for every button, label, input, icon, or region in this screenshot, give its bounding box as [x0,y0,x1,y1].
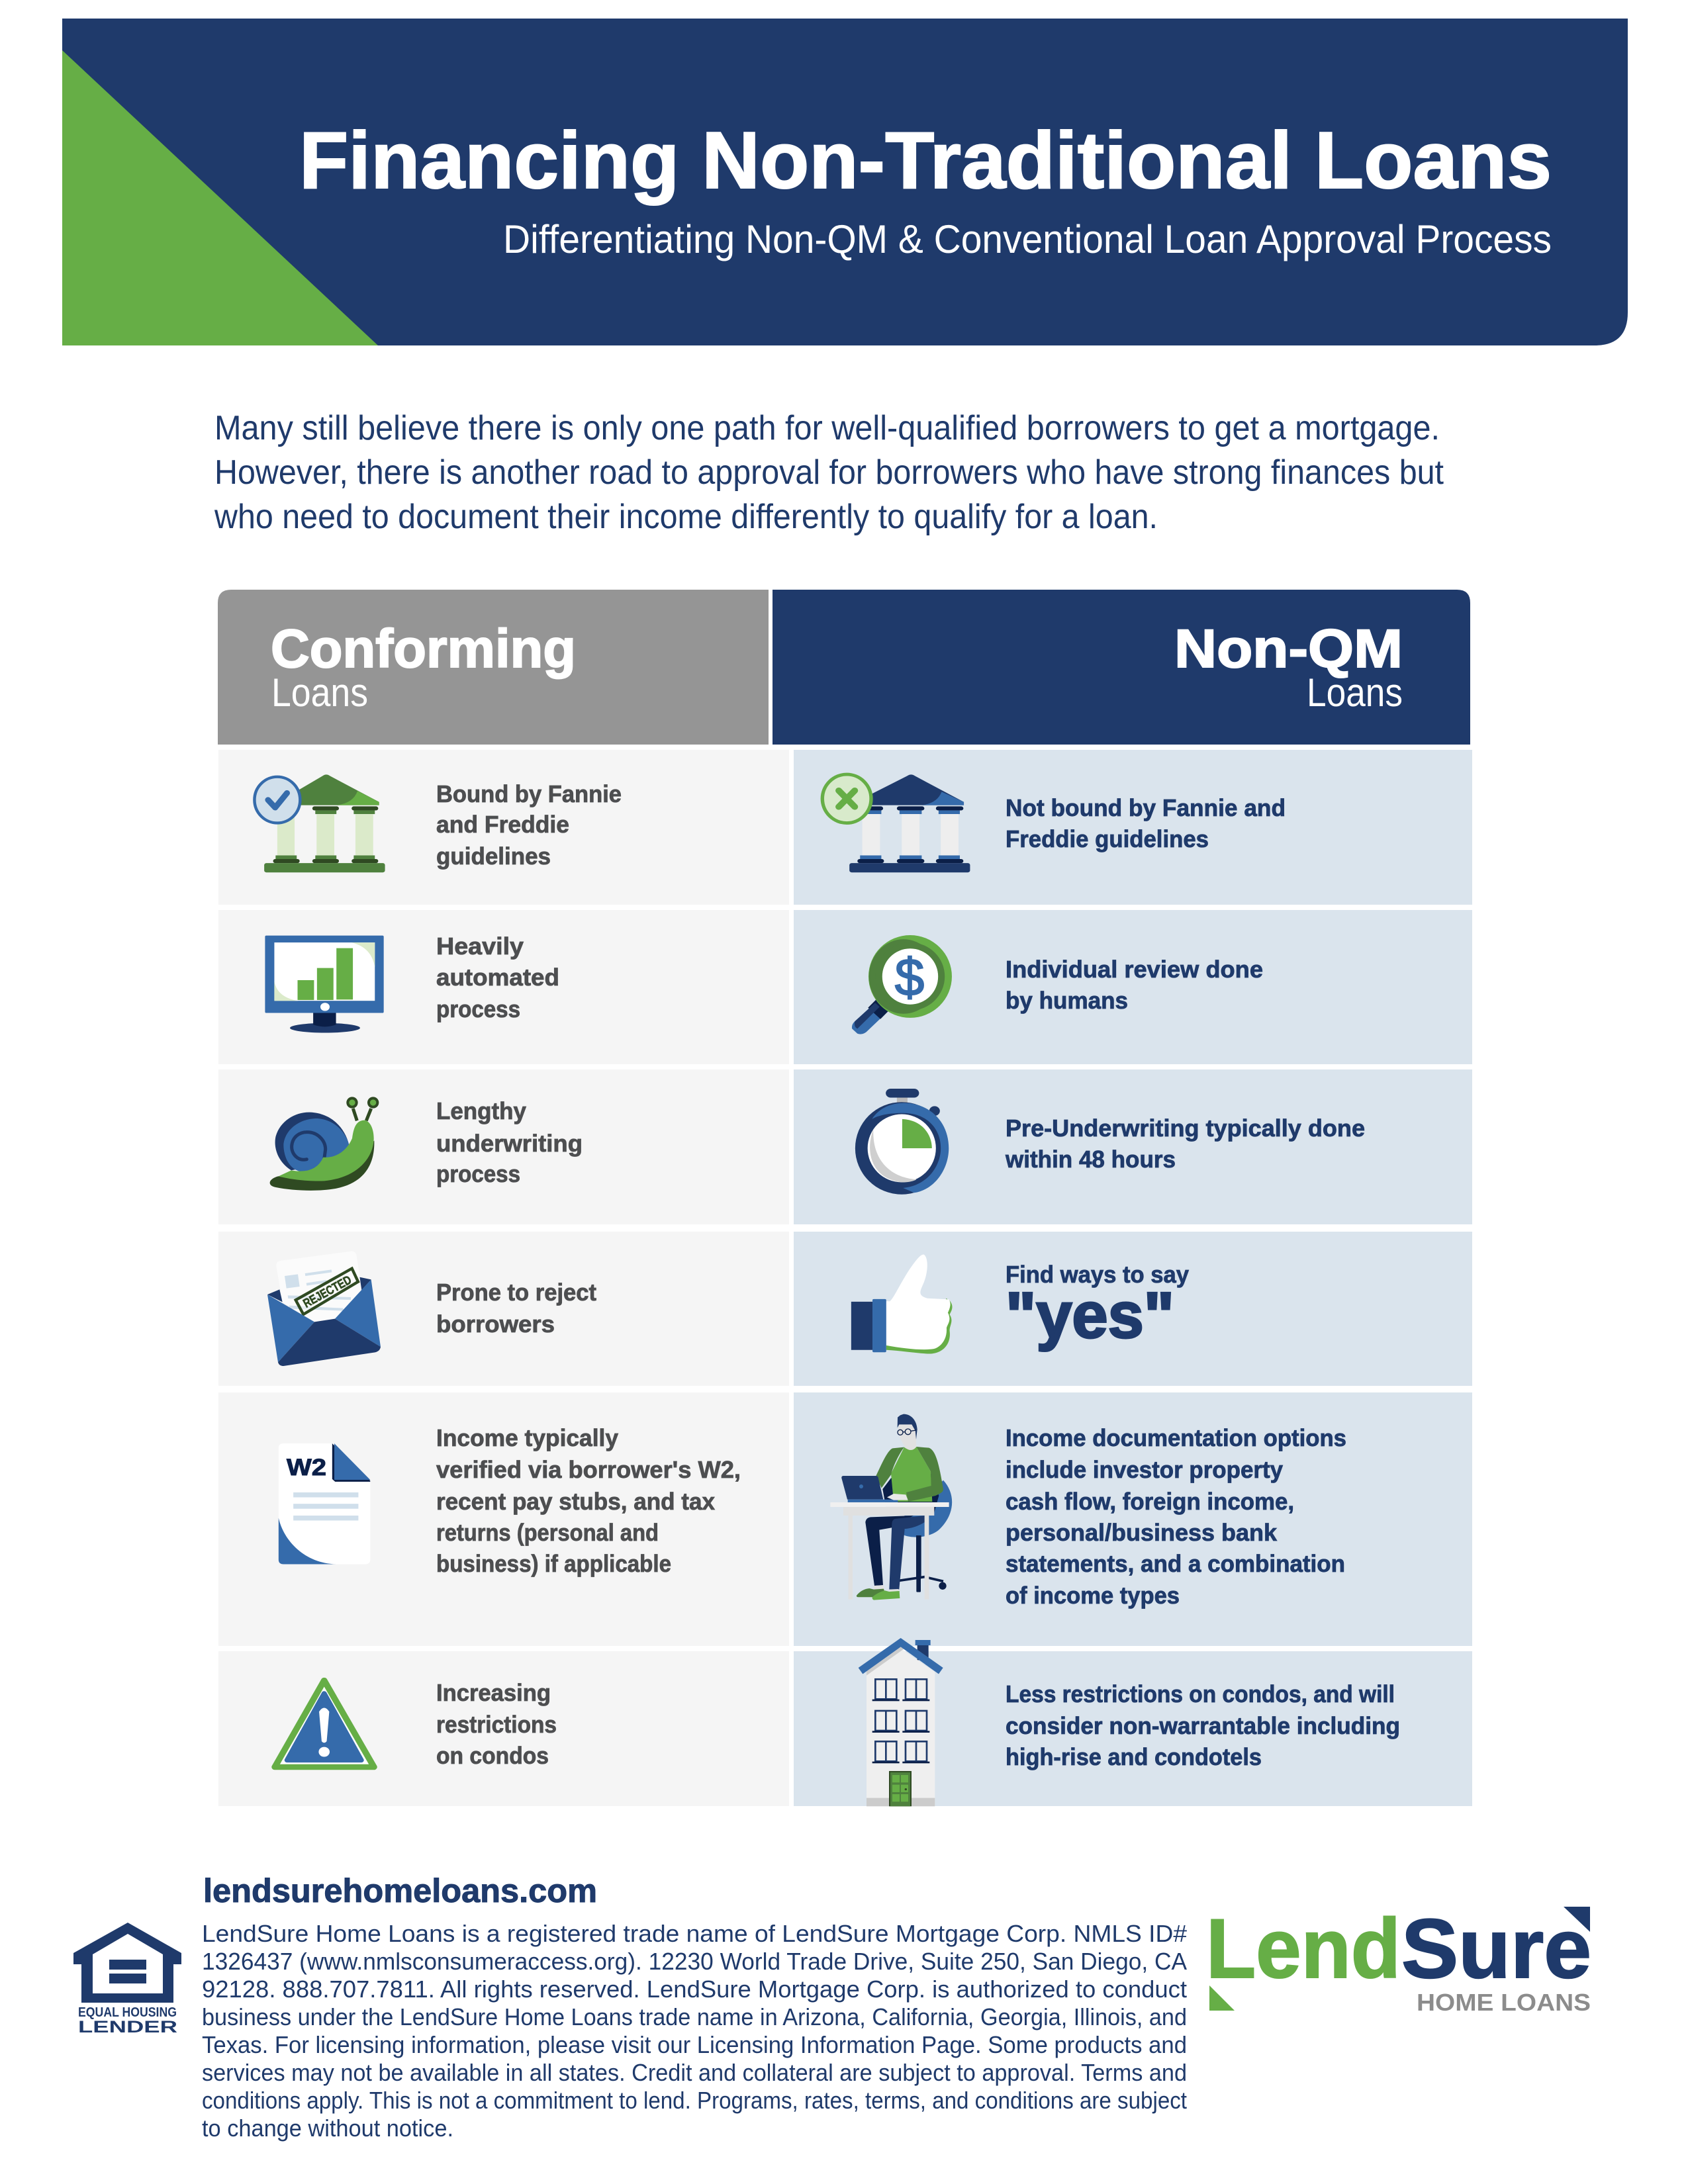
text: Less restrictions on condos, and will [1006,1680,1395,1707]
text: consider non-warrantable including [1006,1712,1400,1739]
text: high-rise and condotels [1006,1743,1262,1770]
panel: conforming row 3 [218,1069,789,1224]
panel: non-QM row 4 [794,1232,1472,1386]
icon: navy bank with X [822,774,970,872]
text [436,1279,596,1338]
text: recent pay stubs, and tax [436,1488,715,1515]
legal disclaimer text [202,1920,1187,2142]
legal disclaimer text: conditions apply. This is not a commitment to lend. Programs, rates, terms, and conditions are subject [202,2087,1187,2114]
icon: condo building [859,1638,943,1806]
logo: LendSure Home Loans: Sure [1401,1901,1591,1995]
text: Bound by Fannie [436,780,622,807]
emphasised word: "yes" [1006,1279,1174,1351]
icon: W2 document [279,1443,370,1564]
icon: magnifier with dollar: $ [895,948,924,1007]
intro paragraph: However, there is another road to approval for borrowers who have strong finances but [214,453,1444,492]
icon: rejected envelope: REJECTED [301,1273,353,1310]
text: Freddie guidelines [1006,825,1209,852]
icon: W2 document: W2 [287,1455,326,1480]
icon: warning triangle [275,1680,374,1767]
legal disclaimer text: business under the LendSure Home Loans trade name in Arizona, California, Georgia, Illinois, and [202,2003,1187,2030]
text: of income types [1006,1582,1180,1609]
text: on condos [436,1742,549,1769]
logo: equal housing lender: LENDER [78,2018,177,2036]
text: Individual review done [1006,956,1263,983]
text: include investor property [1006,1456,1283,1483]
text: business) if applicable [436,1550,671,1577]
legal disclaimer text: services may not be available in all states. Credit and collateral are subject to approval. Terms and [202,2059,1187,2086]
panel: conforming row 1 [218,750,789,905]
text [436,1097,583,1187]
panel: conforming row 2 [218,910,789,1064]
text: returns (personal and [436,1519,659,1546]
panel: non-QM row 6 [794,1638,1472,1806]
panel: conforming row 6 [218,1651,789,1806]
text: Find ways to say [1006,1261,1189,1288]
logo: equal housing lender [73,1923,181,2036]
text: verified via borrower's W2, [436,1456,741,1483]
text [1006,794,1286,852]
text [1006,956,1263,1014]
text: Not bound by Fannie and [1006,794,1286,821]
text: Prone to reject [436,1279,596,1306]
text: within 48 hours [1005,1146,1176,1173]
subtitle: Differentiating Non-QM & Conventional Loan Approval Process [503,217,1552,261]
intro paragraph [214,409,1444,536]
text: restrictions [436,1711,557,1738]
text: process [436,1160,520,1187]
panel: non-QM row 3 [794,1069,1472,1224]
panel: non-QM row 1 [794,750,1472,905]
intro paragraph: who need to document their income differently to qualify for a loan. [214,498,1158,536]
column heading: Non-QM Loans: Loans [1307,670,1403,715]
column heading: Non-QM Loans [773,590,1470,745]
text: statements, and a combination [1006,1550,1345,1577]
text: Lengthy [436,1097,526,1124]
text [436,780,622,870]
icon: green bank with check [254,774,385,872]
title: Financing Non-Traditional Loans [299,115,1552,205]
text: borrowers [436,1310,555,1338]
text [436,1679,557,1769]
green corner triangle [62,50,378,345]
text: personal/business bank [1006,1519,1278,1546]
legal disclaimer text: Texas. For licensing information, please visit our Licensing Information Page. Some products and [202,2031,1187,2058]
text [1006,1424,1346,1609]
text: Pre-Underwriting typically done [1006,1115,1365,1142]
column heading: Conforming Loans: Conforming [271,619,576,679]
logo: LendSure Home Loans [1206,1901,1591,2016]
column heading: Conforming Loans: Loans [271,670,368,715]
text: automated [436,964,559,991]
text: by humans [1006,987,1128,1014]
legal disclaimer text: LendSure Home Loans is a registered trade name of LendSure Mortgage Corp. NMLS ID# [202,1920,1187,1947]
intro paragraph: Many still believe there is only one path for well-qualified borrowers to get a mortgage. [214,409,1440,447]
text [1006,1680,1400,1770]
icon: magnifier with dollar [852,935,952,1034]
panel: non-QM row 5 [794,1392,1472,1646]
legal disclaimer text: 1326437 (www.nmlsconsumeraccess.org). 12230 World Trade Drive, Suite 250, San Diego, CA [202,1948,1187,1975]
icon: stopwatch [855,1089,949,1195]
text: cash flow, foreign income, [1006,1488,1294,1515]
text: underwriting [436,1130,583,1157]
icon: monitor with bar chart [265,936,384,1033]
text [436,933,559,1023]
text: guidelines [436,842,551,870]
text: Heavily [436,933,524,960]
header banner [62,19,1628,345]
icon: snail [270,1098,377,1191]
logo: LendSure Home Loans: HOME LOANS [1417,1989,1591,2016]
legal disclaimer text: 92128. 888.707.7811. All rights reserved. LendSure Mortgage Corp. is authorized to conduct [202,1976,1187,2003]
column heading: Non-QM Loans: Non-QM [1174,619,1403,679]
website link: lendsurehomeloans.com [203,1872,597,1909]
icon: rejected envelope [267,1251,381,1366]
icon: person at laptop [830,1414,952,1600]
text [436,1424,741,1577]
panel: non-QM row 2 [794,910,1472,1064]
panel: conforming row 4 [218,1232,789,1386]
logo: LendSure Home Loans: Lend [1206,1901,1401,1995]
panel: conforming row 5 [218,1392,789,1646]
legal disclaimer text: to change without notice. [202,2115,453,2142]
text: Increasing [436,1679,551,1706]
text [1005,1115,1365,1173]
icon: thumbs up [851,1255,952,1354]
text [1006,1261,1189,1351]
column heading: Conforming Loans [218,590,769,745]
text: process [436,995,520,1023]
logo: equal housing lender: EQUAL HOUSING [78,2005,177,2020]
text: and Freddie [436,811,569,838]
text: Income documentation options [1006,1424,1346,1451]
text: Income typically [436,1424,618,1451]
